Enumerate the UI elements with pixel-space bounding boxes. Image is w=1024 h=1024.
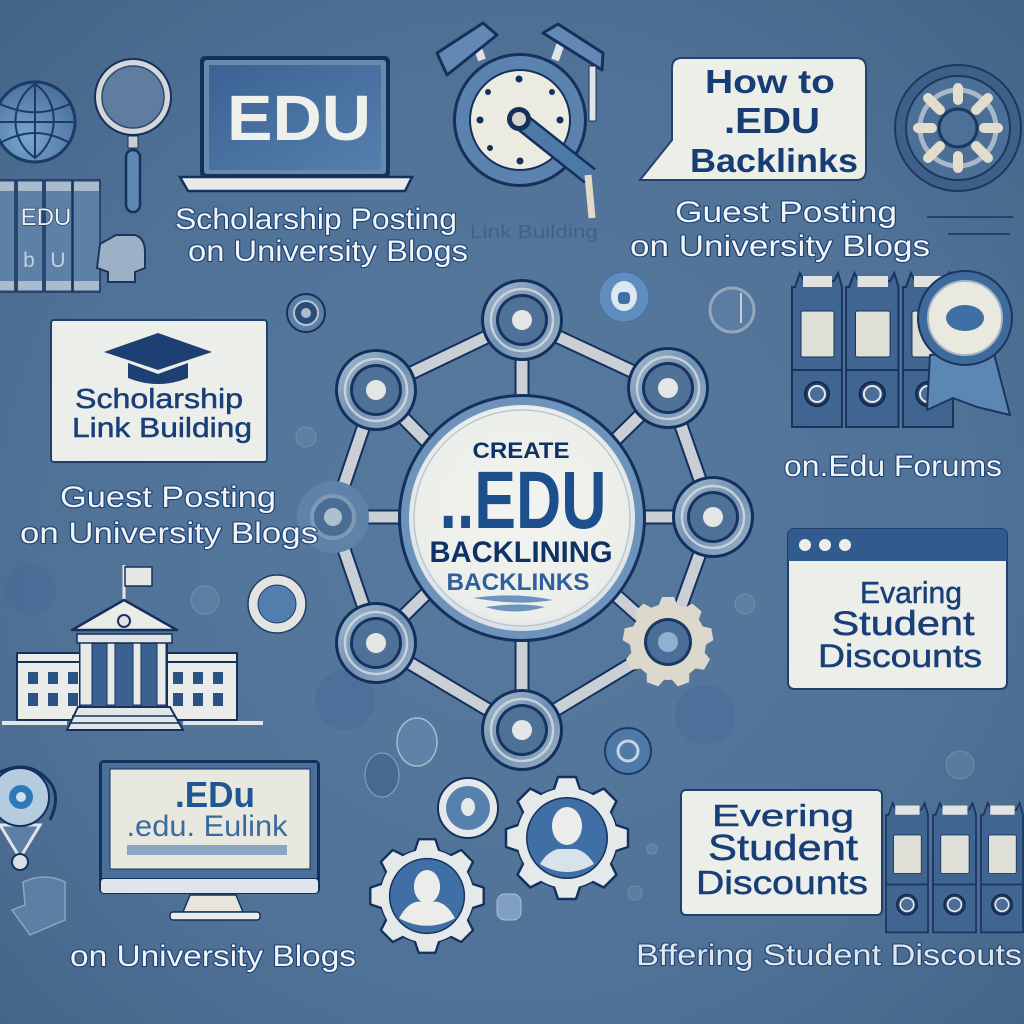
icon: gear person large <box>506 777 628 899</box>
icon: binders bottom right <box>886 803 1023 932</box>
text: guest posting top right: on University Blogs <box>630 230 930 263</box>
center hub: BACKLINING <box>430 536 612 569</box>
panel: evering student discounts: Evering <box>712 798 854 833</box>
text: guest posting top right: Guest Posting <box>675 196 897 229</box>
panel: browser window evaring <box>788 529 1007 689</box>
gear: lower right <box>622 597 714 688</box>
panel: evering student discounts: Student <box>708 827 858 868</box>
callout: how to edu backlinks <box>640 58 866 180</box>
icon: binders and ribbon <box>792 271 1012 427</box>
center hub: CREATE <box>472 438 570 463</box>
node: lower left <box>335 602 417 684</box>
icon: lock <box>97 235 145 282</box>
node: left <box>297 481 369 553</box>
text: guest posting left: on University Blogs <box>20 517 318 550</box>
node: top <box>481 279 563 361</box>
icon: ship wheel badge <box>895 65 1021 191</box>
faint background marks <box>4 427 974 900</box>
network connectors <box>333 320 713 730</box>
callout: how to edu backlinks: Backlinks <box>690 142 858 179</box>
icons: faint badges <box>365 718 651 920</box>
text: offering student discounts: Bffering Student Discouts <box>636 939 1022 972</box>
icon: gear person small <box>370 839 484 953</box>
node: right <box>672 476 754 558</box>
icon: award ribbon <box>918 271 1012 415</box>
center hub <box>398 394 646 642</box>
callout: how to edu backlinks: .EDU <box>724 100 820 141</box>
icon: light bulb <box>0 767 65 935</box>
panel: evering student discounts: Discounts <box>696 864 868 901</box>
network nodes <box>297 279 754 771</box>
callout: how to edu backlinks: How to <box>705 63 835 100</box>
text: link building faint: Link Building <box>470 222 598 242</box>
text: guest posting left: Guest Posting <box>60 481 276 514</box>
node: bottom <box>481 689 563 771</box>
icon: laptop EDU <box>180 56 412 191</box>
icon: monitor edu <box>99 760 320 920</box>
center hub: BACKLINKS <box>446 569 590 596</box>
panel: browser window evaring: Evaring <box>860 575 962 610</box>
text: scholarship posting: on University Blogs <box>188 235 468 268</box>
icon: small binders with EDU: EDU <box>21 204 71 231</box>
icon: monitor edu: .edu. Eulink <box>126 810 289 843</box>
text: scholarship posting <box>175 203 468 268</box>
icon: globe <box>0 82 75 162</box>
icon: small binders with EDU: b <box>23 249 35 272</box>
icon: small lock circle <box>599 272 649 322</box>
panel: browser window evaring: Student <box>832 605 975 643</box>
text: on edu forums: on.Edu Forums <box>784 450 1002 483</box>
icon: university building <box>2 565 263 730</box>
icon: laptop EDU: EDU <box>227 82 371 154</box>
icon: small node top left <box>287 294 325 332</box>
panel: browser window evaring: Discounts <box>818 638 982 674</box>
icon: alarm clock <box>437 23 603 218</box>
icon: small binders with EDU <box>0 180 145 292</box>
icon: magnifying glass <box>94 58 172 212</box>
panel: evering student discounts <box>681 790 882 915</box>
icon: monitor edu: .EDu <box>175 774 255 815</box>
icon: graduation cap <box>104 333 212 384</box>
node: upper left <box>335 349 417 431</box>
panel: scholarship link building <box>51 320 267 462</box>
panel: scholarship link building: Link Building <box>72 412 252 443</box>
icon: small dial <box>710 288 754 332</box>
icon: small circle left <box>248 575 306 633</box>
faint lines right <box>927 217 1013 234</box>
text: scholarship posting: Scholarship Posting <box>175 203 457 236</box>
center hub: ..EDU <box>440 455 606 546</box>
panel: scholarship link building: Scholarship <box>75 383 243 414</box>
text: on university blogs bottom: on University Blogs <box>70 940 356 973</box>
icon: small binders with EDU: U <box>50 249 66 272</box>
icon: small gear middle <box>438 778 498 838</box>
node: upper right <box>627 347 709 429</box>
text: guest posting left <box>20 481 318 550</box>
text: guest posting top right <box>630 196 930 263</box>
